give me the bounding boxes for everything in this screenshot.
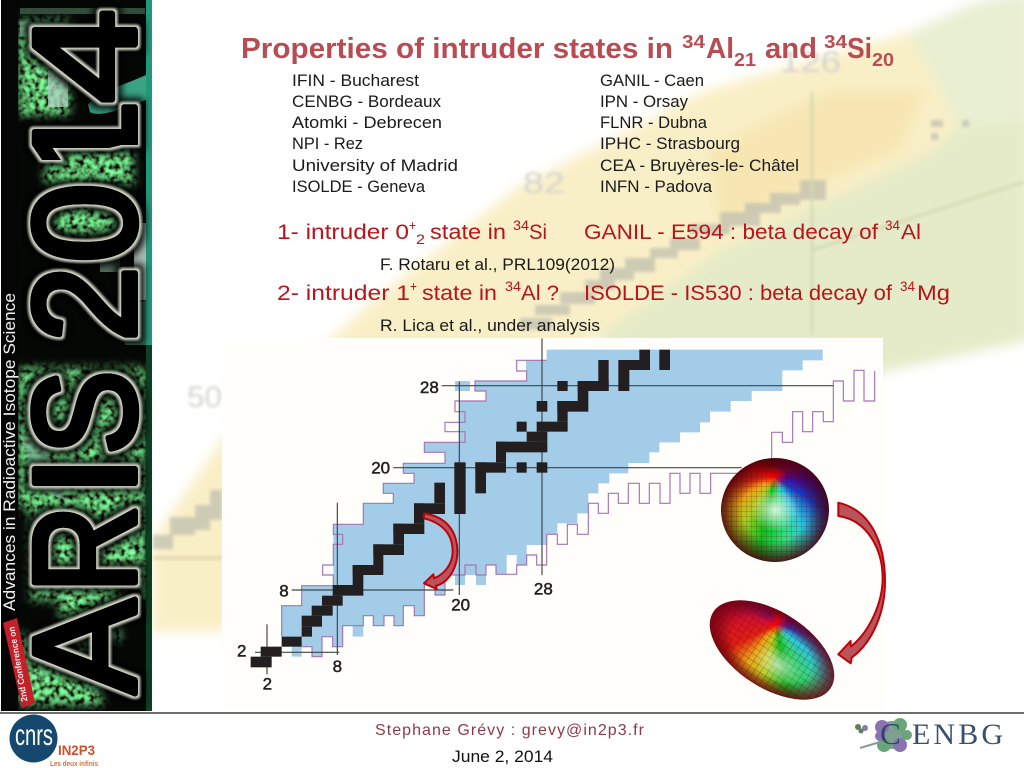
experiment line 1: 2 [416,231,425,247]
experiment line 1: GANIL - E594 : beta decay of [584,220,878,244]
axis labels: 20 [371,458,390,477]
red tag: 2nd Conference on: 2nd Conference on [6,626,29,702]
big letters: 4 [3,9,166,103]
logo: CNRS IN2P3: IN2P3 [58,742,95,758]
axis labels [237,378,553,694]
big letters: 1 [3,100,166,182]
logo: CENBG [855,716,1003,752]
pale bars right [134,223,146,300]
big letters: R [3,505,166,593]
nuclide squares [153,120,969,549]
experiment line 1: + [409,217,416,233]
red tag: 2nd Conference on [3,618,35,708]
experiment line 2: + [410,278,417,294]
banner subtitle: Advances in Radioactive Isotope Science [1,293,19,611]
pale building left [48,70,68,107]
footer: date: June 2, 2014 [452,748,553,766]
big letters [18,6,152,702]
faded magic numbers: 126 [780,46,841,79]
institutions: left column: IFIN - Bucharest [292,72,419,90]
title [241,32,894,70]
blue nuclei region [282,350,823,657]
big letters: S [3,370,166,455]
experiment line 2: ISOLDE - IS530 : beta decay of [584,281,892,305]
institutions: right column: IPN - Orsay [600,93,689,111]
institutions: left column: ISOLDE - Geneva [292,178,426,196]
institutions: left column: NPI - Rez [292,135,363,153]
institutions: left column: Atomki - Debrecen [292,114,442,132]
axis labels: 28 [534,580,553,599]
citation 1: F. Rotaru et al., PRL109(2012) [380,256,615,274]
big letters: 0 [3,183,166,263]
logo: CNRS IN2P3 [10,714,98,768]
logo: CNRS IN2P3: Les deux infinis [50,759,98,768]
institutions: right column: CEA - Bruyères-le- Châtel [600,157,799,175]
axis labels: 2 [263,675,272,694]
title: Al [706,33,734,65]
institutions: right column: INFN - Padova [600,178,713,196]
banner: ARIS 2014 [1,0,166,711]
purple boundary [282,360,875,657]
institutions: right column: GANIL - Caen [600,72,704,90]
experiment line 2: 34 [900,278,915,294]
banner green texture [18,0,146,711]
axis labels: 28 [420,378,439,397]
experiment line 1: Al [901,220,921,244]
logo: CNRS IN2P3: cnrs [15,719,53,752]
teal glove highlight [88,75,146,114]
experiment line 1 [277,217,921,247]
arrow: large curved red arrow [838,503,885,663]
big letters: I [3,455,166,497]
institutions: left column [292,72,458,196]
experiment line 2: state in [422,281,497,305]
institutions: right column: FLNR - Dubna [600,114,708,132]
footer: author: Stephane Grévy : grevy@in2p3.fr [375,722,645,739]
title: and [765,33,817,65]
footer rule [0,712,1024,714]
axis lines [255,338,833,674]
faded magic numbers: 82 [523,167,565,200]
title: 21 [734,50,756,70]
big letters: 2 [3,266,166,342]
institutions: left column: CENBG - Bordeaux [292,93,442,111]
top hatch [20,8,145,14]
title: Properties of intruder states in [241,33,673,65]
experiment line 2: 34 [505,278,521,294]
title: Si [847,33,872,65]
experiment line 1: 1- intruder 0 [277,220,409,244]
experiment line 2: Al ? [521,281,559,305]
experiment line 1: 34 [885,217,900,233]
experiment line 1: 34 [513,217,529,233]
axis labels: 2 [237,642,246,661]
sphere: spherical nucleus [721,458,829,562]
experiment line 2: 2- intruder 1 [277,281,410,305]
title: 20 [872,50,894,70]
axis labels: 8 [279,582,289,601]
background: faded nuclear chart [152,0,1024,632]
axis labels: 8 [333,657,342,676]
green edge strip [146,0,152,345]
faded magic numbers: 50 [187,381,222,414]
experiment line 2 [277,278,950,305]
faded magic numbers [187,46,841,414]
institutions: right column [600,72,799,196]
citation 2: R. Lica et al., under analysis [380,317,600,335]
logo: CENBG: ENBG [912,718,1003,751]
stable nuclei [251,350,670,667]
title: 34 [824,32,847,52]
logo: CENBG: C [880,716,901,751]
ellipsoid: deformed nucleus [692,580,851,720]
institutions: left column: University of Madrid [292,157,458,175]
arrow: small curved red arrow [424,513,457,589]
big letters: A [3,598,166,694]
experiment line 1: state in [430,220,506,244]
experiment line 1: Si [529,220,547,244]
institutions: right column: IPHC - Strasbourg [600,135,740,153]
chart lines [153,92,1024,558]
title: 34 [682,32,705,52]
axis labels: 20 [451,596,470,615]
panel: nuclear chart diagram [222,338,885,710]
experiment line 2: Mg [917,281,950,305]
